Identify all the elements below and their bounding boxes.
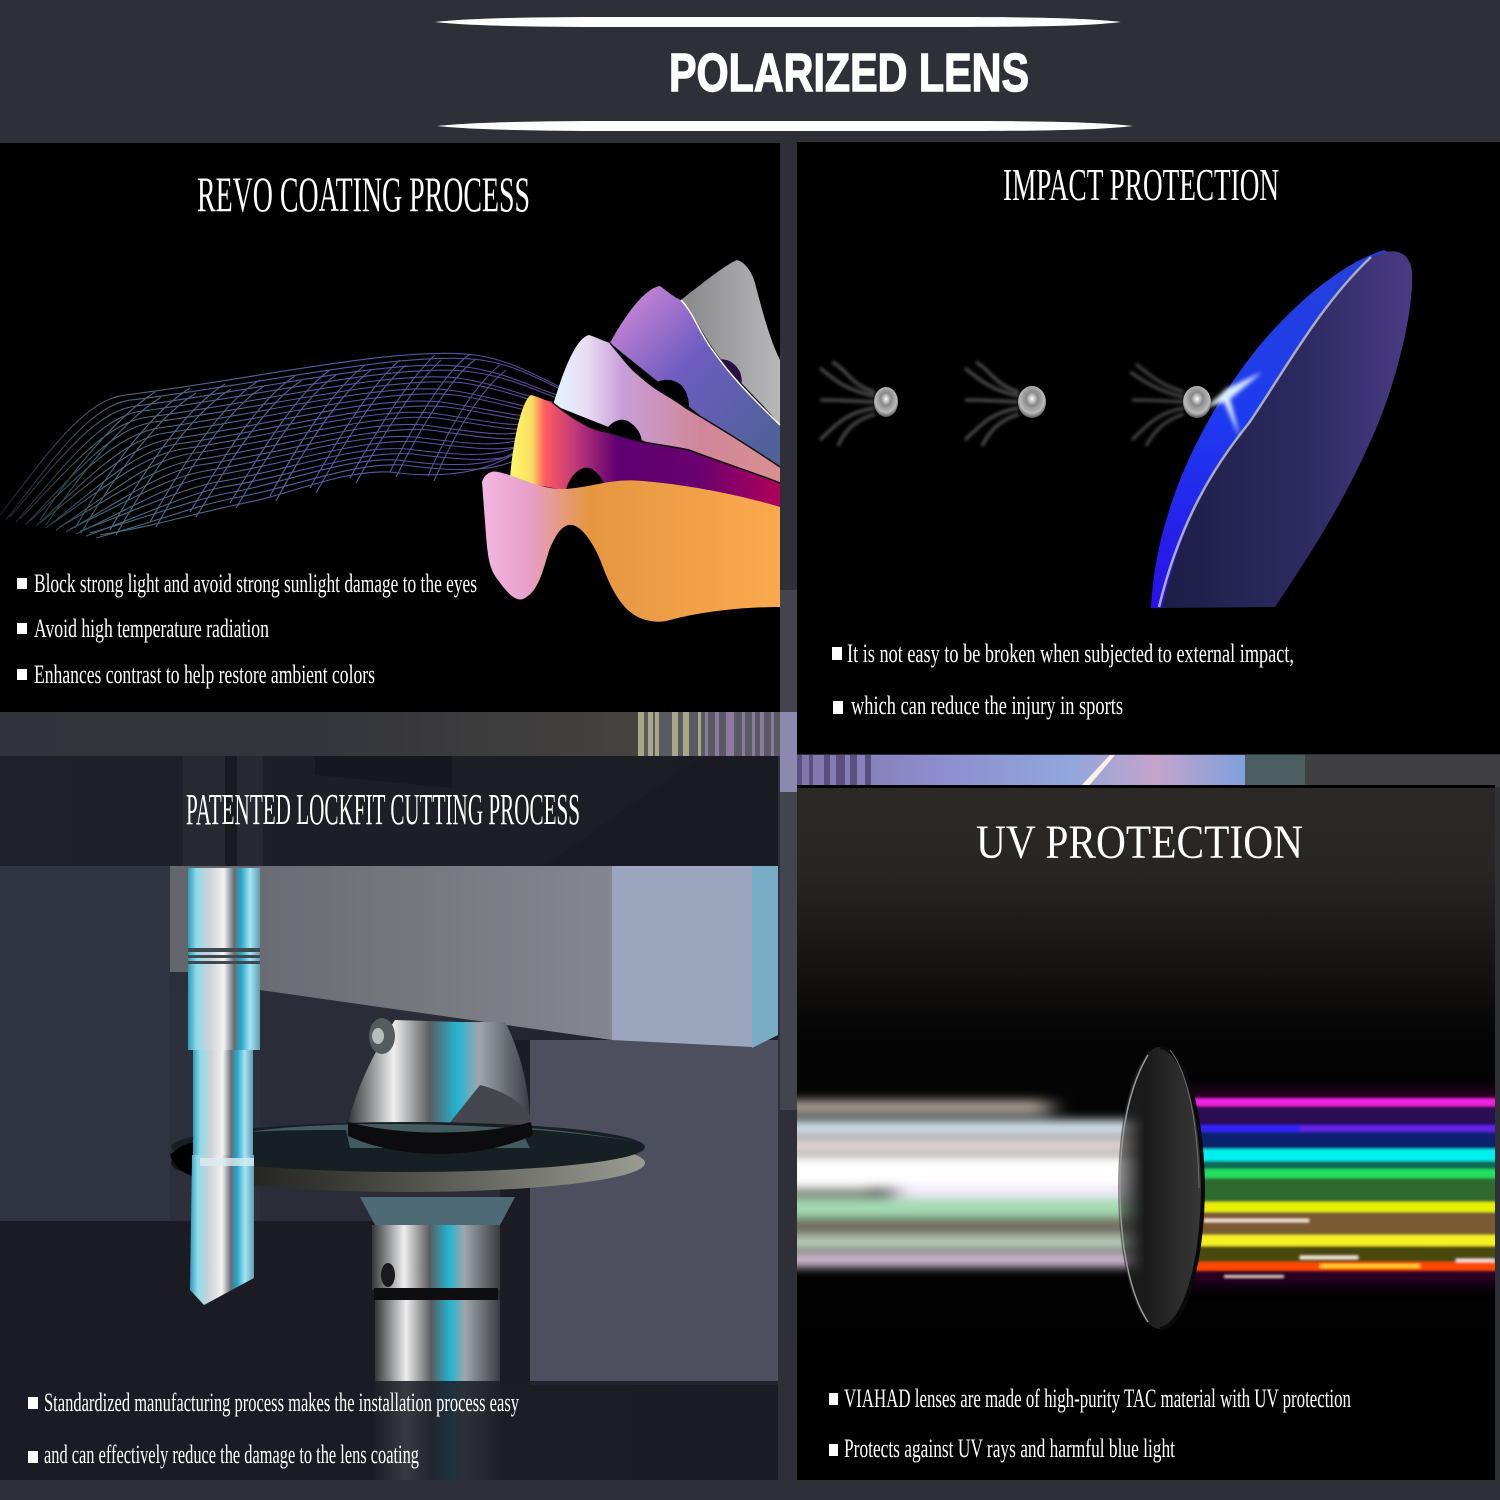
lens hole: pink: [606, 420, 642, 444]
bullet 2: [829, 1434, 1176, 1463]
chart: white light beams before lens: [760, 1100, 1148, 1267]
chart: wave mesh: [0, 353, 568, 538]
panel: impact protection: [797, 142, 1500, 754]
bullet 2: Protects against UV rays and harmful blue light: [844, 1434, 1176, 1463]
bullet 1: [17, 569, 477, 598]
bullet 2: [17, 614, 269, 643]
bullet 1: [832, 639, 1294, 668]
illustration: lens: [1151, 250, 1412, 608]
lens face: [1162, 251, 1412, 608]
bullet 1: Standardized manufacturing process makes the installation process easy: [44, 1388, 519, 1417]
lens: violet: [610, 286, 780, 480]
lens: orange: [482, 471, 780, 622]
bullet 1: It is not easy to be broken when subjected to external impact,: [847, 639, 1294, 668]
panel: revo coating process: [0, 143, 780, 712]
white lens-shaped rule bottom: [437, 121, 1133, 131]
panel: patented lockfit cutting process: [0, 756, 778, 1481]
bullets: impact protection: [832, 639, 1294, 720]
lens edge highlight: [1159, 257, 1371, 607]
bullet 2: Avoid high temperature radiation: [34, 614, 269, 643]
heading: impact protection: IMPACT PROTECTION: [1003, 159, 1279, 210]
photo: machine block: [170, 866, 778, 1048]
lens hole: violet: [654, 380, 689, 412]
lens: magenta: [510, 395, 780, 530]
lens: gray: [681, 260, 780, 425]
heading band: [0, 756, 699, 866]
bullet 2: and can effectively reduce the damage to the lens coating: [44, 1440, 419, 1469]
chart: rainbow rays after lens: [1180, 1090, 1500, 1285]
bullet 3: [17, 660, 375, 689]
heading band: PATENTED LOCKFIT CUTTING PROCESS: [186, 785, 580, 834]
panel: uv protection: [760, 788, 1500, 1480]
lens: pink: [553, 335, 780, 495]
photo: wall: [0, 756, 778, 1381]
bullets: uv protection: [829, 1384, 1351, 1463]
lens hole: magenta: [566, 468, 606, 490]
illustration: lens: [1118, 1047, 1203, 1329]
bullet 2: [833, 691, 1123, 720]
photo: lower shaft: [360, 1197, 515, 1480]
panel: top title: [435, 17, 1133, 131]
lens rim blue: [1151, 250, 1392, 608]
bullet 1: [28, 1392, 519, 1416]
white lens-shaped rule top: [435, 17, 1121, 27]
lens hole: gray: [712, 359, 742, 386]
icon: steel ball 3: [1130, 364, 1211, 446]
icon: steel ball 2: [965, 362, 1046, 446]
bullets band: [0, 1381, 778, 1480]
heading: revo coating process: REVO COATING PROCESS: [197, 166, 530, 222]
title text: POLARIZED LENS: [669, 43, 1029, 103]
photo: lens disc: [170, 1122, 645, 1192]
bullet 2: which can reduce the injury in sports: [851, 691, 1123, 720]
icon: steel ball 1: [820, 362, 898, 446]
bullet 1: Block strong light and avoid strong sunlight damage to the eyes: [34, 569, 477, 598]
background strip between upper and lower panels: [0, 590, 1500, 1110]
photo: cutter bit: [188, 868, 260, 1305]
bullet 3: Enhances contrast to help restore ambient colors: [34, 660, 375, 689]
heading: uv protection: UV PROTECTION: [976, 816, 1303, 869]
lens flare: [1205, 372, 1262, 438]
bullet 2: [28, 1444, 419, 1468]
bullets: revo coating: [17, 569, 477, 689]
photo: upper collar cone: [348, 1018, 530, 1135]
